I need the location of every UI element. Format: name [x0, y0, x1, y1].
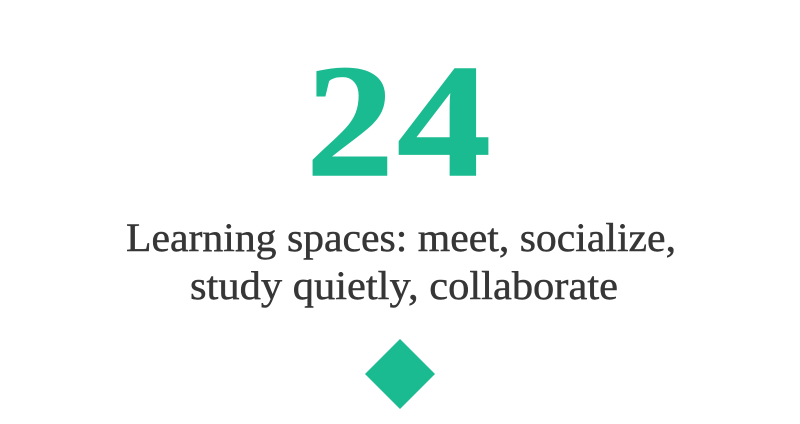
second digit: 4: [397, 32, 491, 210]
heading line 2: study quietly, collaborate: [190, 263, 618, 308]
heading line 1: Learning spaces: meet, socialize,: [126, 215, 676, 260]
icon: diamond: [365, 339, 435, 409]
first digit: 2: [306, 32, 394, 210]
heading text: [126, 215, 676, 308]
big number: [306, 32, 491, 210]
